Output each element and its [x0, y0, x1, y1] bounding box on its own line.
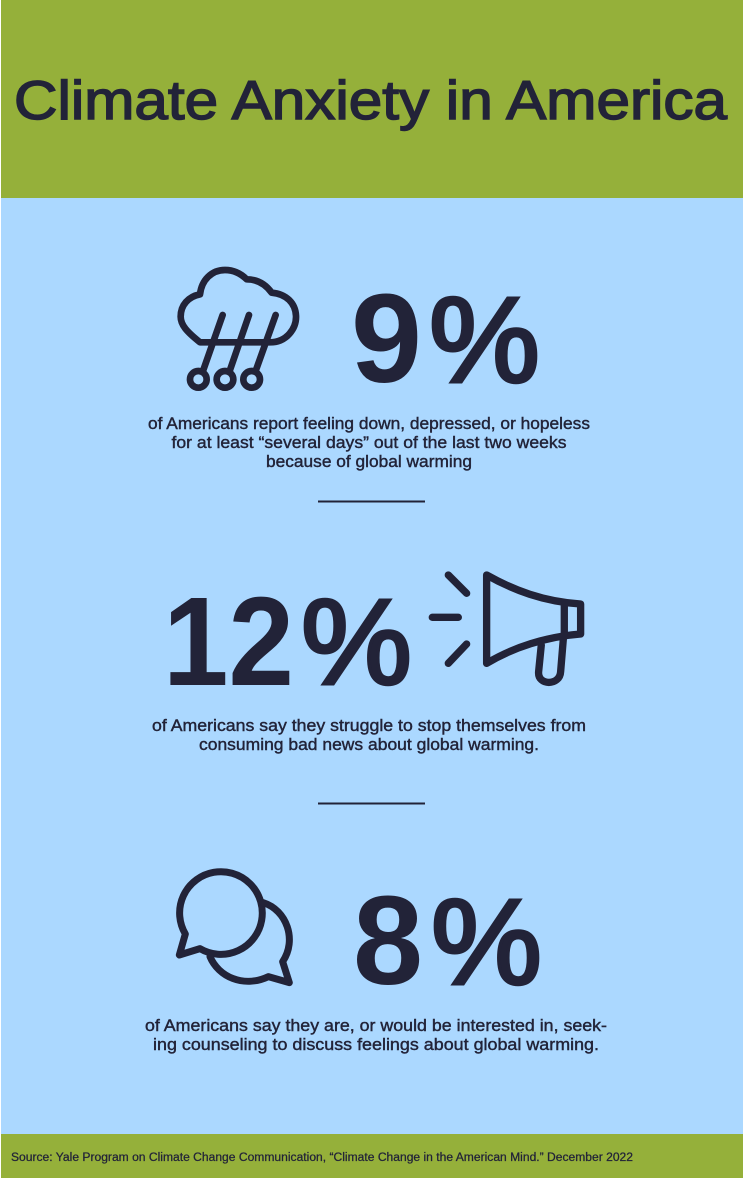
- icon: speech bubbles: [179, 872, 289, 983]
- statistic: 8%: 8: [353, 870, 423, 1011]
- statistic: 9%: %: [429, 272, 540, 408]
- icon: megaphone: [432, 575, 581, 682]
- text block: 8% description: [145, 1017, 607, 1054]
- statistic: 12%: [163, 571, 412, 712]
- statistic: 12%: %: [301, 574, 412, 710]
- text block: 8% description: of Americans say they are, or would be interested in, seek-: [145, 1017, 607, 1035]
- panel: header band: [1, 0, 743, 198]
- panel: footer band: [1, 1134, 743, 1178]
- text block: 9% description: of Americans report feeling down, depressed, or hopeless: [148, 415, 590, 433]
- text block: 9% description: for at least “several days” out of the last two weeks: [172, 434, 566, 452]
- text block: 12% description: consuming bad news about global warming.: [199, 736, 539, 754]
- icon: rain cloud: [181, 270, 296, 388]
- text block: 12% description: [152, 717, 586, 754]
- statistic: 12%: 12: [163, 571, 294, 712]
- text block: 8% description: ing counseling to discuss feelings about global warming.: [153, 1036, 599, 1054]
- text block: 9% description: [148, 415, 590, 471]
- statistic: 8%: %: [431, 874, 542, 1010]
- text block: 12% description: of Americans say they struggle to stop themselves from: [152, 717, 586, 735]
- title: Climate Anxiety in America: [14, 69, 727, 131]
- statistic: 9%: [351, 268, 540, 409]
- statistic: 9%: 9: [351, 268, 422, 409]
- panel: main background: [1, 198, 743, 1134]
- source note: Source: Yale Program on Climate Change Communication, “Climate Change in the American Mind.” December 2022: [11, 1152, 633, 1164]
- statistic: 8%: [353, 870, 542, 1011]
- text block: 9% description: because of global warming: [266, 453, 472, 471]
